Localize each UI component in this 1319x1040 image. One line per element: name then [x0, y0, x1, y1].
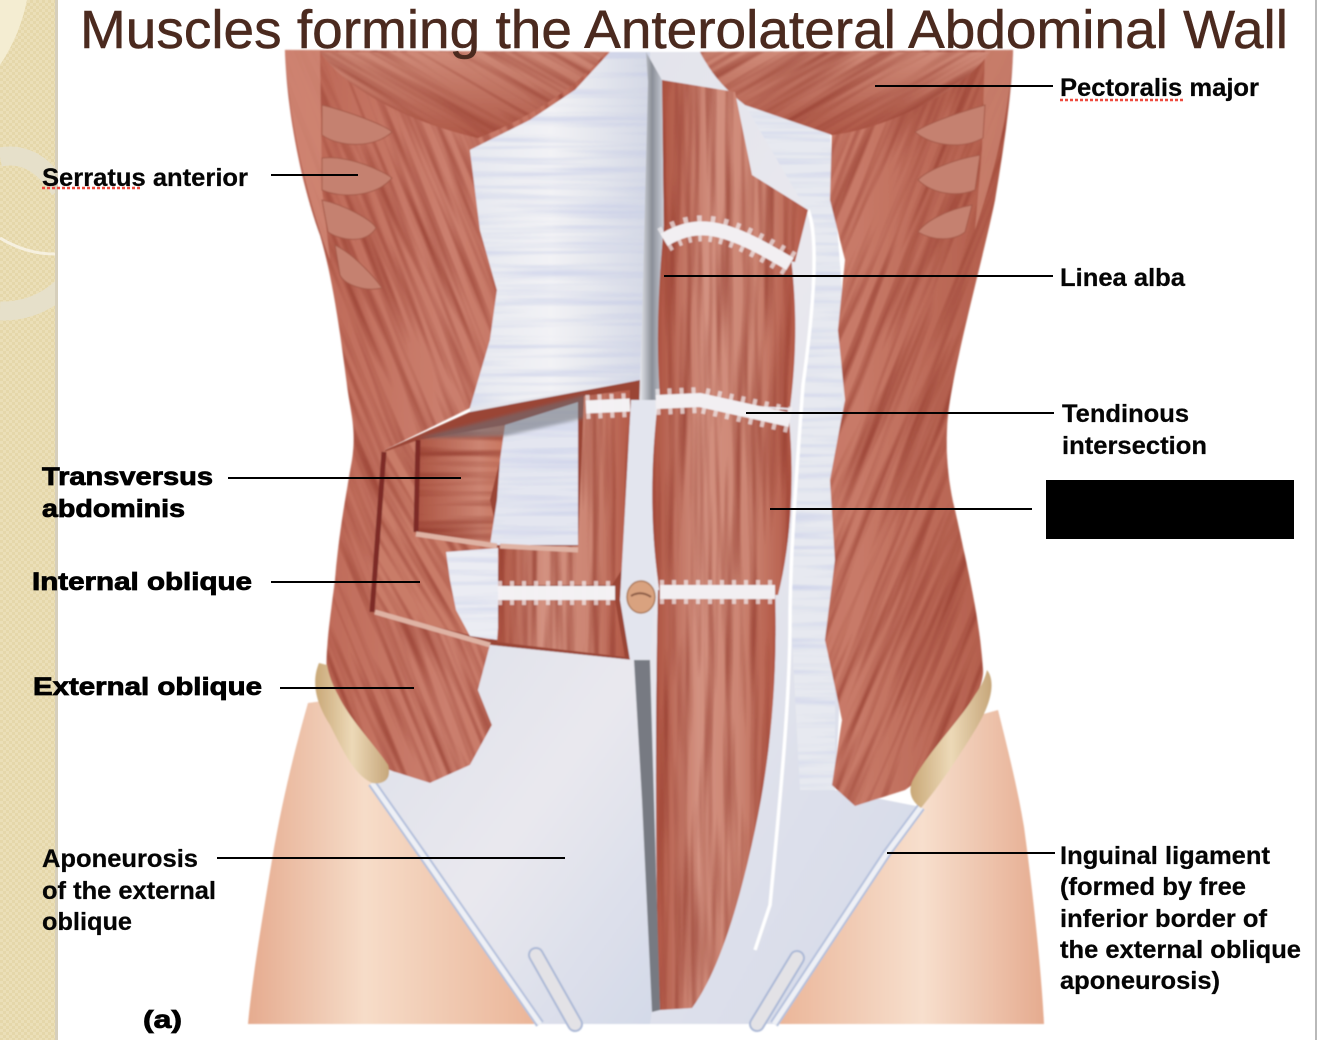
aponeurosis base: [372, 52, 921, 1024]
left thigh skin: [248, 700, 540, 1024]
pectoralis major right: [664, 0, 1026, 261]
internal oblique aponeurosis: [446, 548, 498, 640]
right aponeurosis flap: [745, 105, 845, 790]
inguinal ligament left: [372, 783, 540, 1024]
right rectus segment 4: [656, 590, 776, 1010]
label: Aponeurosis of the external oblique: [42, 845, 565, 936]
label: Transversus abdominis: [42, 463, 461, 523]
external oblique right: [437, 0, 1276, 915]
cut edges: [372, 440, 418, 612]
serratus anterior digitations right: [915, 105, 985, 239]
label: Aponeurosis of the external oblique: of the external: [42, 877, 216, 905]
transversus aponeurosis: [490, 402, 578, 545]
iliac crest left: [315, 663, 389, 783]
title: Muscles forming the Anterolateral Abdominal Wall: [80, 0, 1288, 60]
central groove upper: [640, 52, 664, 400]
label: Inguinal ligament: Inguinal ligament: [1060, 842, 1271, 870]
label: External oblique: External oblique: [33, 673, 262, 701]
slide right border: [1315, 0, 1317, 1040]
left rectus lower segment: [497, 600, 625, 657]
label: Transversus abdominis: Transversus: [42, 463, 213, 491]
tendinous band left upper: [586, 405, 630, 407]
label: Internal oblique: Internal oblique: [32, 568, 252, 596]
internal oblique: [288, 386, 587, 694]
linea alba lower central band: [620, 400, 655, 660]
tendinous intersection 3: [660, 585, 775, 599]
left rectus upper segment: [498, 390, 630, 585]
lateral rectus sheath edge: [755, 210, 814, 950]
lateral strip left: [285, 50, 330, 260]
tendinous band left lower: [498, 586, 615, 600]
cut groove lower: [634, 660, 660, 1012]
umbilicus: [627, 581, 655, 613]
label: Pectoralis major: Pectoralis major: [1060, 74, 1259, 102]
slide background side strip: [0, 0, 62, 1040]
right cord: [757, 958, 797, 1024]
label: Aponeurosis of the external oblique: Aponeurosis: [42, 845, 198, 873]
pectoralis major left: [283, 0, 643, 262]
label: Inguinal ligament: [887, 842, 1301, 995]
label: Inguinal ligament: inferior border of: [1060, 905, 1268, 933]
serratus anterior digitations left: [322, 105, 392, 289]
redacted label: [770, 480, 1294, 539]
external oblique left: [30, 0, 865, 896]
label: Tendinous intersection: intersection: [1062, 432, 1207, 460]
label: Tendinous intersection: Tendinous: [1062, 400, 1189, 428]
upper left aponeurosis flap: [470, 52, 650, 408]
window base: [375, 380, 640, 660]
label: Serratus anterior: Serratus anterior: [42, 164, 248, 192]
label: Linea alba: Linea alba: [1060, 264, 1186, 292]
transversus abdominis muscle: [418, 425, 505, 545]
label: Inguinal ligament: (formed by free: [1060, 873, 1246, 901]
label: Inguinal ligament: the external oblique: [1060, 936, 1301, 964]
right thigh skin: [774, 710, 1044, 1024]
right rectus segment 3: [652, 400, 792, 595]
lateral strip right: [975, 50, 1013, 230]
shadow under flap: [418, 395, 585, 438]
label: Inguinal ligament: aponeurosis): [1060, 967, 1220, 995]
panel tag (a): (a): [143, 1006, 182, 1034]
window: exposed deep layers: [288, 380, 640, 694]
right rectus segment 1: [662, 80, 808, 262]
iliac crest right: [910, 670, 992, 808]
tendinous intersection 1: [664, 228, 790, 264]
label: Transversus abdominis: abdominis: [42, 495, 185, 523]
right rectus segment 2: [658, 225, 795, 408]
label: Aponeurosis of the external oblique: oblique: [42, 908, 132, 936]
lower left aponeurosis flap: [372, 645, 652, 1024]
tendinous intersection 2: [656, 400, 790, 420]
muscle cut margins: [375, 534, 578, 645]
inguinal ligament right: [774, 807, 921, 1024]
left cord: [536, 955, 575, 1024]
label: Tendinous intersection: [746, 400, 1207, 460]
